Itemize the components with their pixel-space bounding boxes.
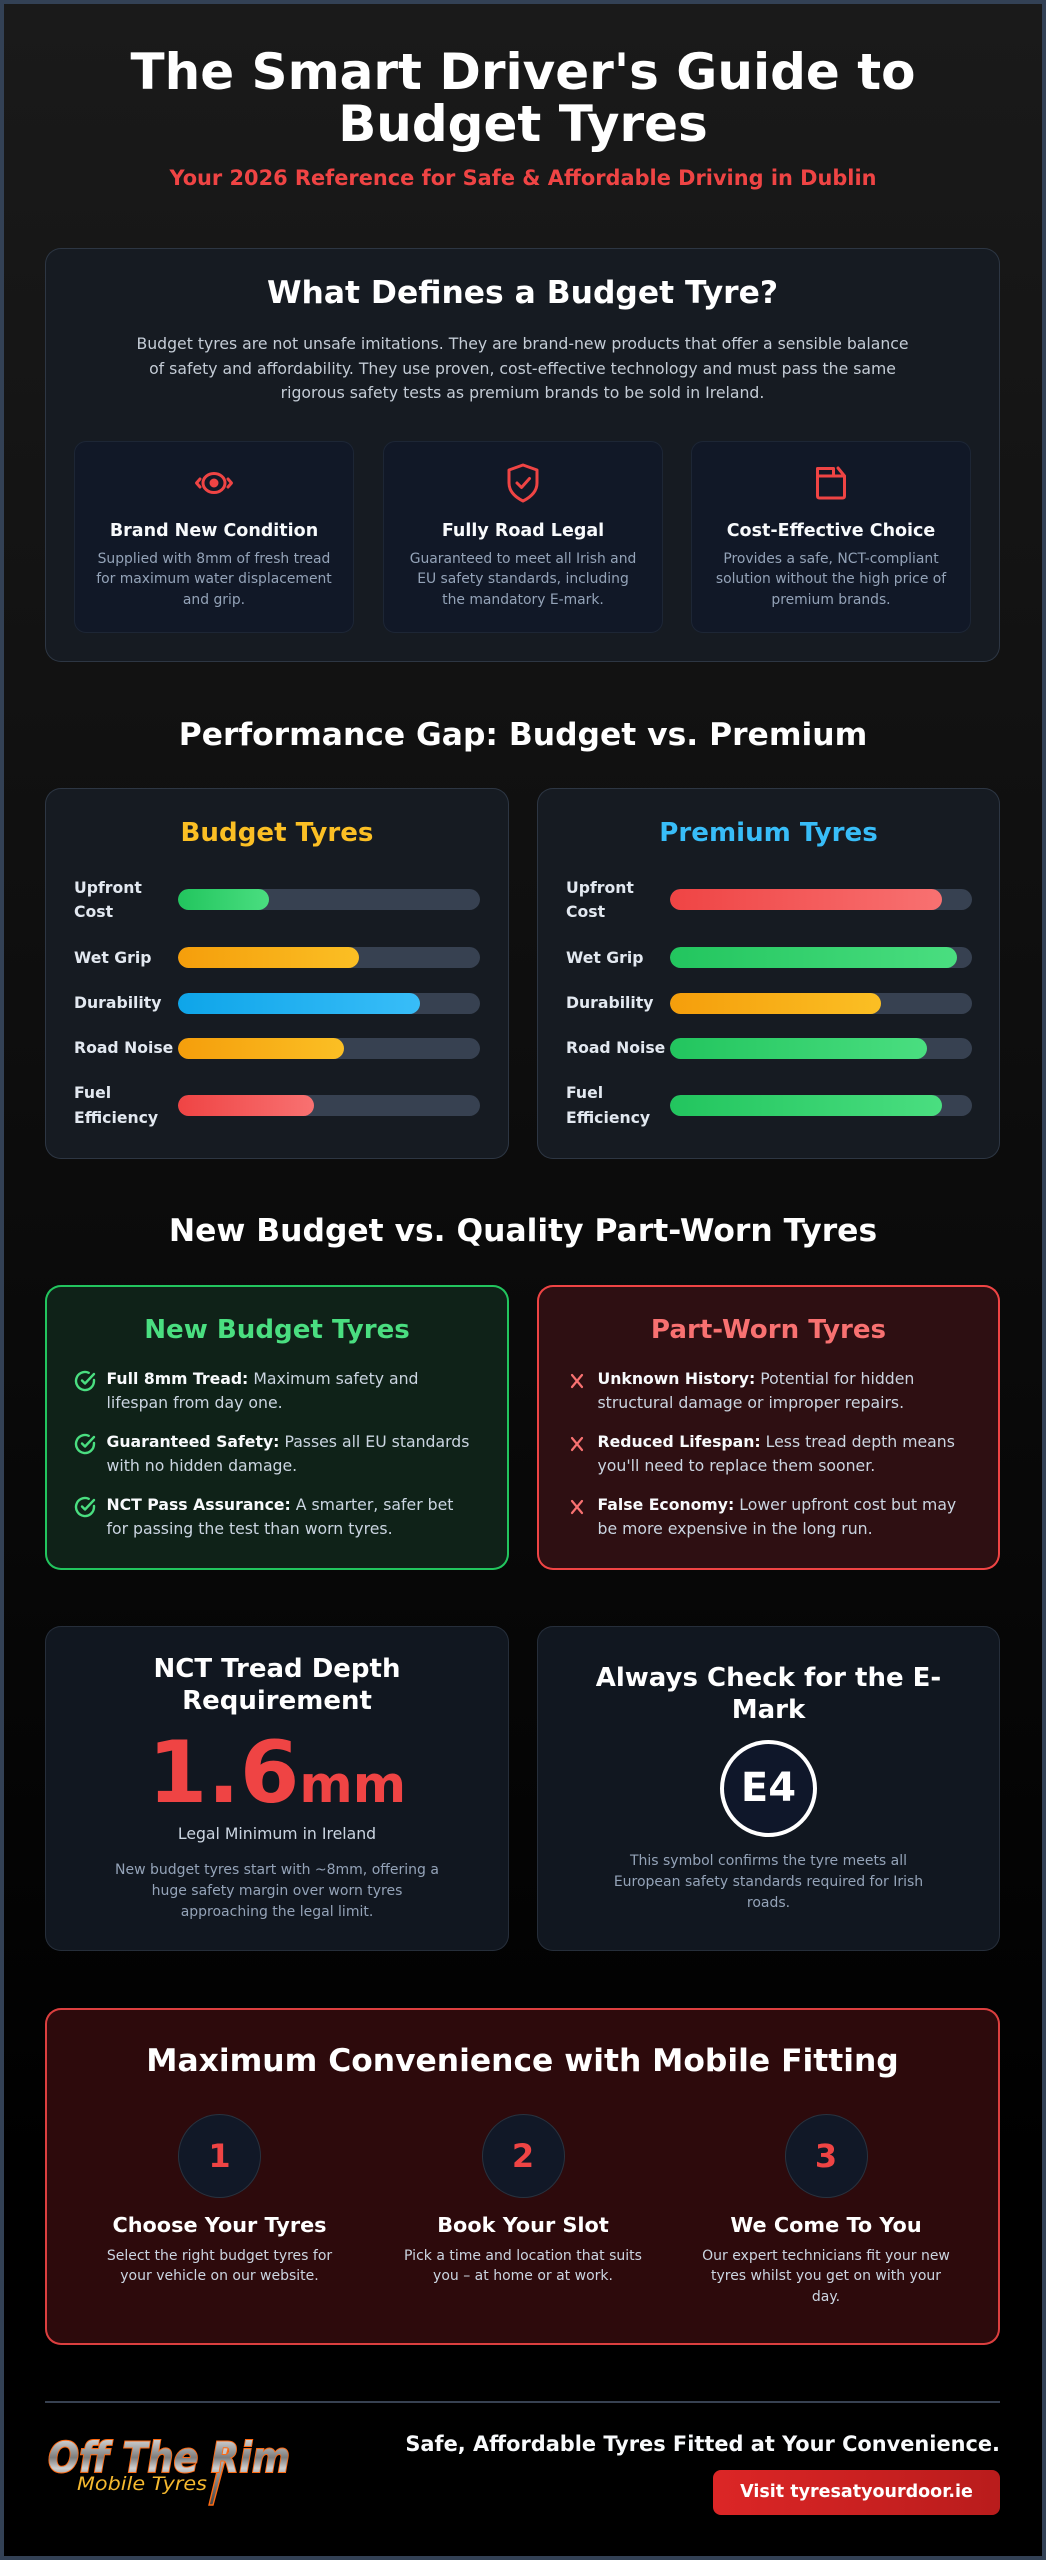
label: upfront cost: Cost — [74, 902, 113, 921]
card description: premium brands. — [771, 592, 891, 608]
panel heading: Mark — [732, 1694, 805, 1724]
panel: budget tyres bars — [45, 788, 509, 1159]
explanation: approaching the legal limit. — [181, 1904, 373, 1920]
list item: guaranteed safety: with no hidden damage. — [106, 1456, 297, 1475]
intro text: of safety and affordability. They use proven, cost-effective technology and must pass the same — [149, 358, 896, 378]
list item: guaranteed safety: Guaranteed Safety: Passes all EU standards — [106, 1432, 469, 1450]
label: upfront cost: Cost — [566, 902, 605, 921]
list item: unknown history — [598, 1368, 914, 1412]
step 1 description: your vehicle on our website. — [120, 2268, 319, 2284]
step 3 number: 3 — [815, 2137, 837, 2175]
panel: mobile fitting — [45, 2008, 1000, 2345]
list item: guaranteed safety — [106, 1432, 469, 1475]
bar: upfront cost 90% — [670, 889, 972, 910]
title: Budget Tyres — [338, 94, 708, 152]
button: visit website: Visit tyresatyourdoor.ie — [740, 2482, 973, 2502]
card description: and grip. — [183, 592, 245, 608]
card heading: Cost-Effective Choice — [727, 521, 935, 541]
bar: wet grip 95% — [670, 947, 972, 968]
e-mark badge: E4 — [741, 1765, 796, 1811]
list item: false economy — [598, 1494, 956, 1538]
icon: cross — [570, 1374, 584, 1388]
logo tagline: Mobile Tyres — [77, 2473, 207, 2495]
heading: what defines: What Defines a Budget Tyre? — [267, 275, 778, 311]
step 1 heading: Choose Your Tyres — [112, 2213, 327, 2237]
panel: new budget tyres — [45, 1285, 509, 1570]
panel: part-worn tyres — [537, 1285, 1000, 1570]
bar: road noise 55% — [178, 1038, 480, 1058]
card heading: Brand New Condition — [110, 521, 318, 541]
icon: folder tag — [816, 466, 846, 500]
list item: nct pass assurance: for passing the test than worn tyres. — [106, 1519, 393, 1538]
step 3 heading: We Come To You — [730, 2213, 922, 2237]
bar: wet grip 60% — [178, 947, 480, 968]
card description: for maximum water displacement — [96, 571, 332, 587]
explanation: European safety standards required for Irish — [614, 1874, 923, 1890]
panel heading: Premium Tyres — [659, 818, 878, 848]
card description — [410, 550, 636, 608]
list item: nct pass assurance — [106, 1494, 454, 1538]
card description: Provides a safe, NCT-compliant — [723, 550, 939, 566]
explanation: New budget tyres start with ~8mm, offering a — [115, 1862, 439, 1878]
step 2 description: you – at home or at work. — [433, 2268, 613, 2284]
list item: nct pass assurance: NCT Pass Assurance: A smarter, safer bet — [106, 1494, 453, 1514]
step 1 number — [178, 2114, 261, 2198]
step 3 description: tyres whilst you get on with your — [711, 2268, 941, 2284]
big stat: 1.6mm: 1.6mm — [148, 1724, 406, 1823]
label: fuel efficiency — [74, 1083, 158, 1126]
list item: unknown history: structural damage or improper repairs. — [598, 1393, 904, 1412]
explanation: This symbol confirms the tyre meets all — [630, 1853, 907, 1869]
label: durability: Durability — [566, 992, 654, 1012]
logo leg of R — [209, 2442, 230, 2505]
card: cost-effective choice — [691, 441, 971, 633]
bar: road noise 85% — [670, 1038, 972, 1058]
list item: false economy: False Economy: Lower upfront cost but may — [598, 1494, 956, 1514]
subtitle: Your 2026 Reference for Safe & Affordable Driving in Dublin — [170, 166, 876, 190]
card description: EU safety standards, including — [417, 571, 629, 587]
panel heading — [154, 1654, 400, 1716]
step 2 description — [404, 2248, 642, 2284]
label: road noise: Road Noise — [74, 1038, 173, 1057]
label: fuel efficiency: Efficiency — [74, 1108, 158, 1126]
step 3 description: day. — [812, 2289, 840, 2305]
title: The Smart Driver's Guide to — [131, 42, 915, 100]
label: upfront cost — [566, 878, 634, 921]
label: road noise: Road Noise — [566, 1038, 665, 1057]
card: brand new condition — [74, 441, 354, 633]
card description: solution without the high price of — [716, 571, 946, 587]
card description — [96, 550, 332, 608]
label: fuel efficiency: Efficiency — [566, 1108, 650, 1126]
explanation — [115, 1862, 439, 1920]
panel: e-mark — [537, 1626, 1000, 1951]
intro text: Budget tyres are not unsafe imitations. They are brand-new products that offer a sensible balance — [136, 334, 909, 353]
step 2 heading: Book Your Slot — [437, 2213, 609, 2237]
intro text — [136, 334, 909, 402]
label: upfront cost: Upfront — [74, 878, 142, 896]
icon: check — [74, 1434, 96, 1454]
list item: full 8mm tread — [106, 1368, 419, 1412]
explanation: huge safety margin over worn tyres — [152, 1882, 402, 1898]
bar: durability 70% — [670, 992, 972, 1014]
list item: full 8mm tread: lifespan from day one. — [106, 1393, 283, 1412]
bar: fuel efficiency 90% — [670, 1095, 972, 1116]
step 2 number: 2 — [512, 2137, 534, 2175]
panel heading: Always Check for the E- — [596, 1663, 941, 1693]
footer tagline: Safe, Affordable Tyres Fitted at Your Convenience. — [405, 2432, 1000, 2456]
panel heading: Part-Worn Tyres — [651, 1314, 886, 1344]
bar: durability 80% — [178, 992, 480, 1014]
panel: nct tread depth — [45, 1626, 509, 1951]
list item: full 8mm tread: Full 8mm Tread: Maximum safety and — [106, 1368, 419, 1388]
list item: reduced lifespan: Reduced Lifespan: Less tread depth means — [598, 1432, 955, 1450]
label: wet grip: Wet Grip — [566, 948, 644, 966]
step 1 description — [107, 2248, 332, 2284]
icon: cross — [570, 1436, 584, 1452]
intro text: rigorous safety tests as premium brands to be sold in Ireland. — [281, 383, 764, 402]
label: durability: Durability — [74, 992, 162, 1012]
panel heading: Requirement — [182, 1686, 372, 1716]
e-mark badge — [720, 1740, 817, 1837]
card description — [716, 550, 946, 608]
bar: upfront cost 30% — [178, 889, 480, 910]
icon: eye — [195, 472, 233, 494]
panel heading — [596, 1663, 941, 1724]
step 1 description: Select the right budget tyres for — [107, 2248, 332, 2264]
card description: Guaranteed to meet all Irish and — [410, 550, 636, 566]
list item: reduced lifespan: you'll need to replace them sooner. — [598, 1456, 875, 1475]
card description: the mandatory E-mark. — [442, 592, 604, 608]
step 2 description: Pick a time and location that suits — [404, 2248, 642, 2264]
list item: unknown history: Unknown History: Potential for hidden — [598, 1368, 914, 1388]
list item: reduced lifespan — [598, 1432, 955, 1475]
card: fully road legal — [383, 441, 663, 633]
heading: new budget vs part-worn: New Budget vs. Quality Part-Worn Tyres — [169, 1213, 877, 1249]
icon: cross — [570, 1500, 584, 1514]
label: fuel efficiency: Fuel — [74, 1083, 111, 1102]
bar: fuel efficiency 45% — [178, 1095, 480, 1116]
step 3 description: Our expert technicians fit your new — [702, 2248, 950, 2264]
panel heading: Maximum Convenience with Mobile Fitting — [146, 2043, 899, 2079]
card heading: Fully Road Legal — [442, 521, 604, 541]
label: fuel efficiency: Fuel — [566, 1083, 603, 1102]
stat caption: Legal Minimum in Ireland — [178, 1824, 376, 1843]
card description: Supplied with 8mm of fresh tread — [98, 550, 330, 566]
label: upfront cost — [74, 878, 142, 921]
explanation — [614, 1853, 923, 1911]
step 3 description — [702, 2248, 950, 2305]
icon: check — [74, 1370, 96, 1392]
panel: what defines a budget tyre — [45, 248, 1000, 662]
step 1 number: 1 — [208, 2137, 231, 2175]
label: fuel efficiency — [566, 1083, 650, 1126]
panel: premium tyres bars — [537, 788, 1000, 1159]
title — [130, 42, 915, 152]
label: wet grip: Wet Grip — [74, 948, 152, 966]
heading: performance gap: Performance Gap: Budget vs. Premium — [179, 717, 867, 753]
label: upfront cost: Upfront — [566, 878, 634, 896]
explanation: roads. — [747, 1895, 790, 1911]
logo: off the rim — [48, 2433, 290, 2506]
button: visit website — [713, 2470, 1000, 2515]
icon: shield check — [508, 464, 538, 502]
icon: check — [74, 1496, 96, 1518]
step 2 number — [482, 2114, 564, 2198]
panel heading: New Budget Tyres — [144, 1314, 410, 1344]
panel heading: NCT Tread Depth — [154, 1654, 400, 1684]
list item: false economy: be more expensive in the long run. — [598, 1519, 873, 1538]
step 3 number — [784, 2114, 868, 2198]
panel heading: Budget Tyres — [181, 818, 373, 848]
